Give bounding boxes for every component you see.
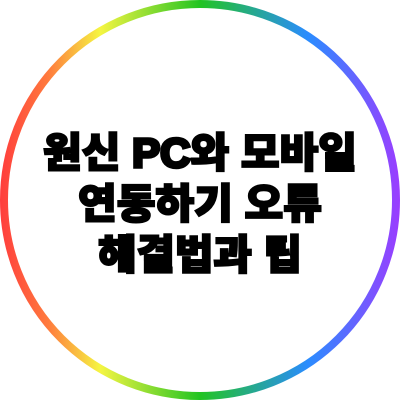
- title line 3: 해결법과 팁: [98, 232, 302, 278]
- title: [43, 130, 357, 278]
- title line 1: 원신 PC와 모바일: [43, 130, 357, 176]
- title line 2: 연동하기 오류: [78, 181, 322, 227]
